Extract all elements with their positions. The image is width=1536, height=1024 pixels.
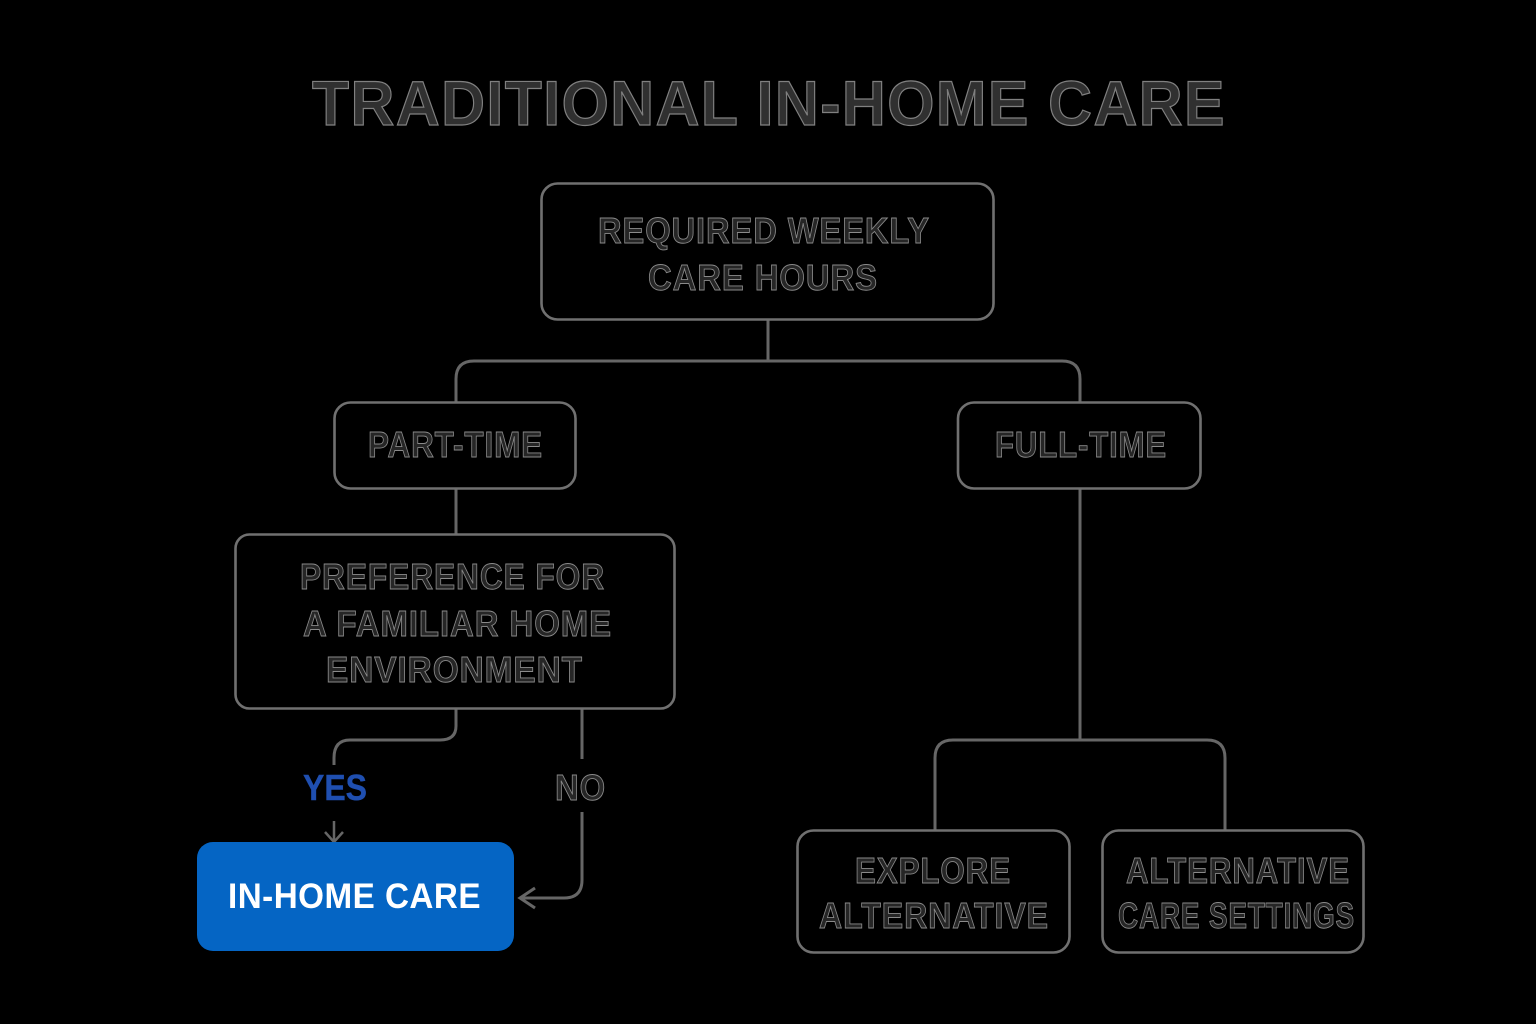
- connector: part-time to preference: [454, 489, 458, 534]
- box: in-home care outcome: IN-HOME CARE: [228, 877, 481, 916]
- box: explore alternative: ALTERNATIVE: [819, 895, 1049, 936]
- arrow: yes to in-home care: [325, 821, 343, 842]
- box: preference for a familiar home environment: [236, 534, 674, 708]
- connector: preference to yes: [334, 709, 456, 765]
- label: no: NO: [555, 767, 606, 808]
- box: required weekly care hours: CARE HOURS: [648, 257, 878, 298]
- box: part-time: PART-TIME: [368, 424, 543, 465]
- box: preference for a familiar home environment: A FAMILIAR HOME: [303, 603, 612, 644]
- box: part-time: [334, 402, 576, 488]
- box: preference for a familiar home environment: ENVIRONMENT: [326, 649, 583, 690]
- label: yes: YES: [303, 767, 367, 808]
- arrow: no to in-home care: [520, 812, 582, 908]
- box: alternative care settings: ALTERNATIVE: [1126, 850, 1350, 891]
- box: in-home care outcome: [197, 842, 514, 951]
- box: full-time: [958, 402, 1200, 488]
- box: alternative care settings: CARE SETTINGS: [1118, 895, 1355, 936]
- box: explore alternative: [798, 830, 1070, 952]
- connector: full-time to alternatives: [935, 489, 1225, 830]
- box: explore alternative: EXPLORE: [855, 850, 1011, 891]
- connector: preference to no: [580, 709, 584, 759]
- connector: weekly hours to part-time and full-time: [456, 320, 1080, 402]
- box: preference for a familiar home environment: PREFERENCE FOR: [300, 556, 605, 597]
- box: required weekly care hours: REQUIRED WEEKLY: [598, 210, 930, 251]
- box: alternative care settings: [1102, 830, 1364, 952]
- box: full-time: FULL-TIME: [995, 424, 1167, 465]
- box: required weekly care hours: [542, 184, 994, 320]
- title: TRADITIONAL IN-HOME CARE: [312, 69, 1226, 139]
